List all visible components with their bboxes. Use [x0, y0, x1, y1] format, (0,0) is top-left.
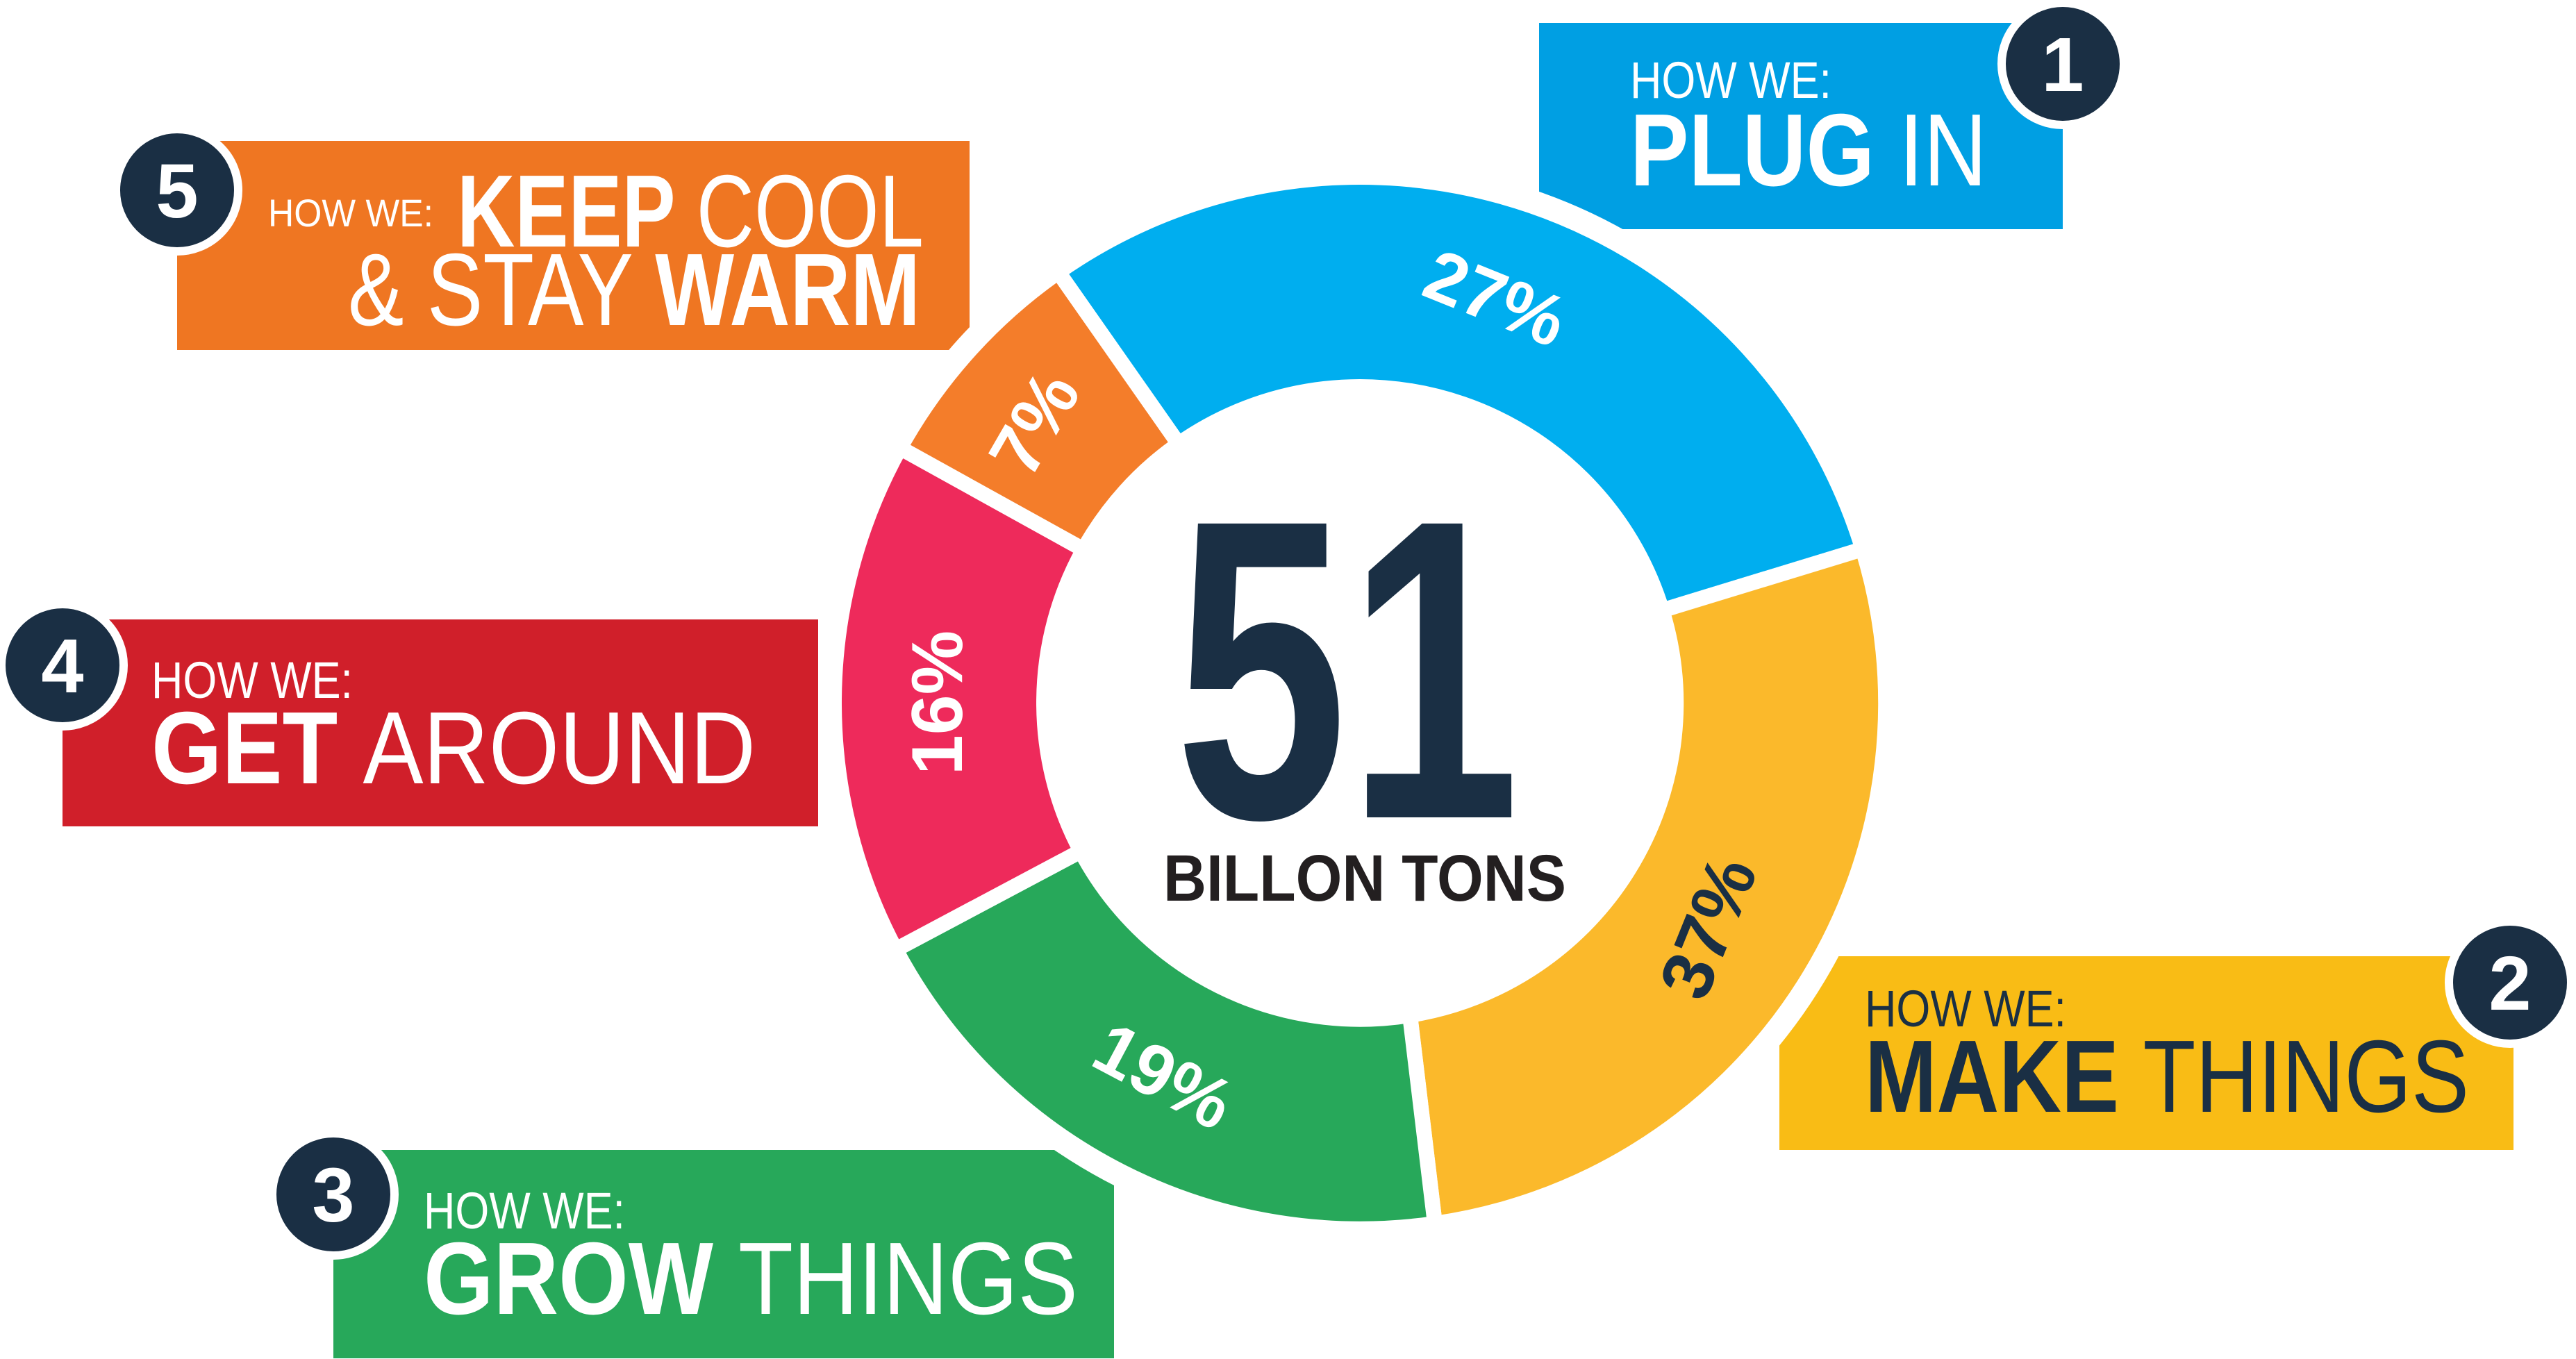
badge 1 [2002, 3, 2124, 125]
panel: plug in [1539, 23, 2063, 229]
heading: make things: HOW WE: [1865, 980, 2066, 1037]
percentage labels: 19% [1081, 1007, 1246, 1146]
badge 2: 2 [2488, 941, 2532, 1026]
center total: 51 billion tons: 51 [1175, 431, 1520, 908]
heading: get around [151, 651, 756, 806]
heading: get around: HOW WE: [151, 651, 353, 709]
percentage labels: 7% [974, 358, 1096, 489]
heading: grow things: GROW THINGS [424, 1222, 1078, 1336]
heading: make things: MAKE THINGS [1865, 1019, 2469, 1134]
badge 3: 3 [312, 1153, 355, 1238]
heading: plug in label: HOW WE: [1630, 51, 1831, 109]
badge 4 [1, 604, 124, 726]
heading: keep cool stay warm: HOW WE: [268, 191, 433, 235]
percentage labels: 16% [897, 631, 978, 775]
badge 1: 1 [2041, 22, 2084, 108]
panel: keep cool [177, 141, 970, 350]
center total: 51 billion tons: BILLON TONS [1163, 842, 1566, 915]
heading: grow things: HOW WE: [424, 1182, 625, 1240]
heading: make things [1865, 980, 2469, 1134]
heading: get around: GET AROUND [151, 691, 756, 806]
badge 2 [2449, 922, 2571, 1044]
panel: get around [63, 619, 818, 826]
percentage labels: 27% [1413, 234, 1577, 363]
panel: make things [1779, 956, 2513, 1150]
percentage labels: 37% [1644, 846, 1773, 1010]
panel: grow things [333, 1150, 1114, 1358]
heading: keep cool stay warm: & STAY WARM [348, 233, 920, 347]
heading: keep cool stay warm [268, 154, 924, 347]
donut chart [818, 161, 1902, 1244]
heading: plug in: PLUG IN [1630, 93, 1987, 208]
percentage labels [897, 234, 1773, 1146]
heading: keep cool stay warm: KEEP COOL [457, 154, 924, 269]
badge 3 [272, 1133, 394, 1256]
badge 5 [116, 129, 238, 251]
badge 5: 5 [156, 149, 199, 234]
badge 4: 4 [41, 624, 84, 709]
